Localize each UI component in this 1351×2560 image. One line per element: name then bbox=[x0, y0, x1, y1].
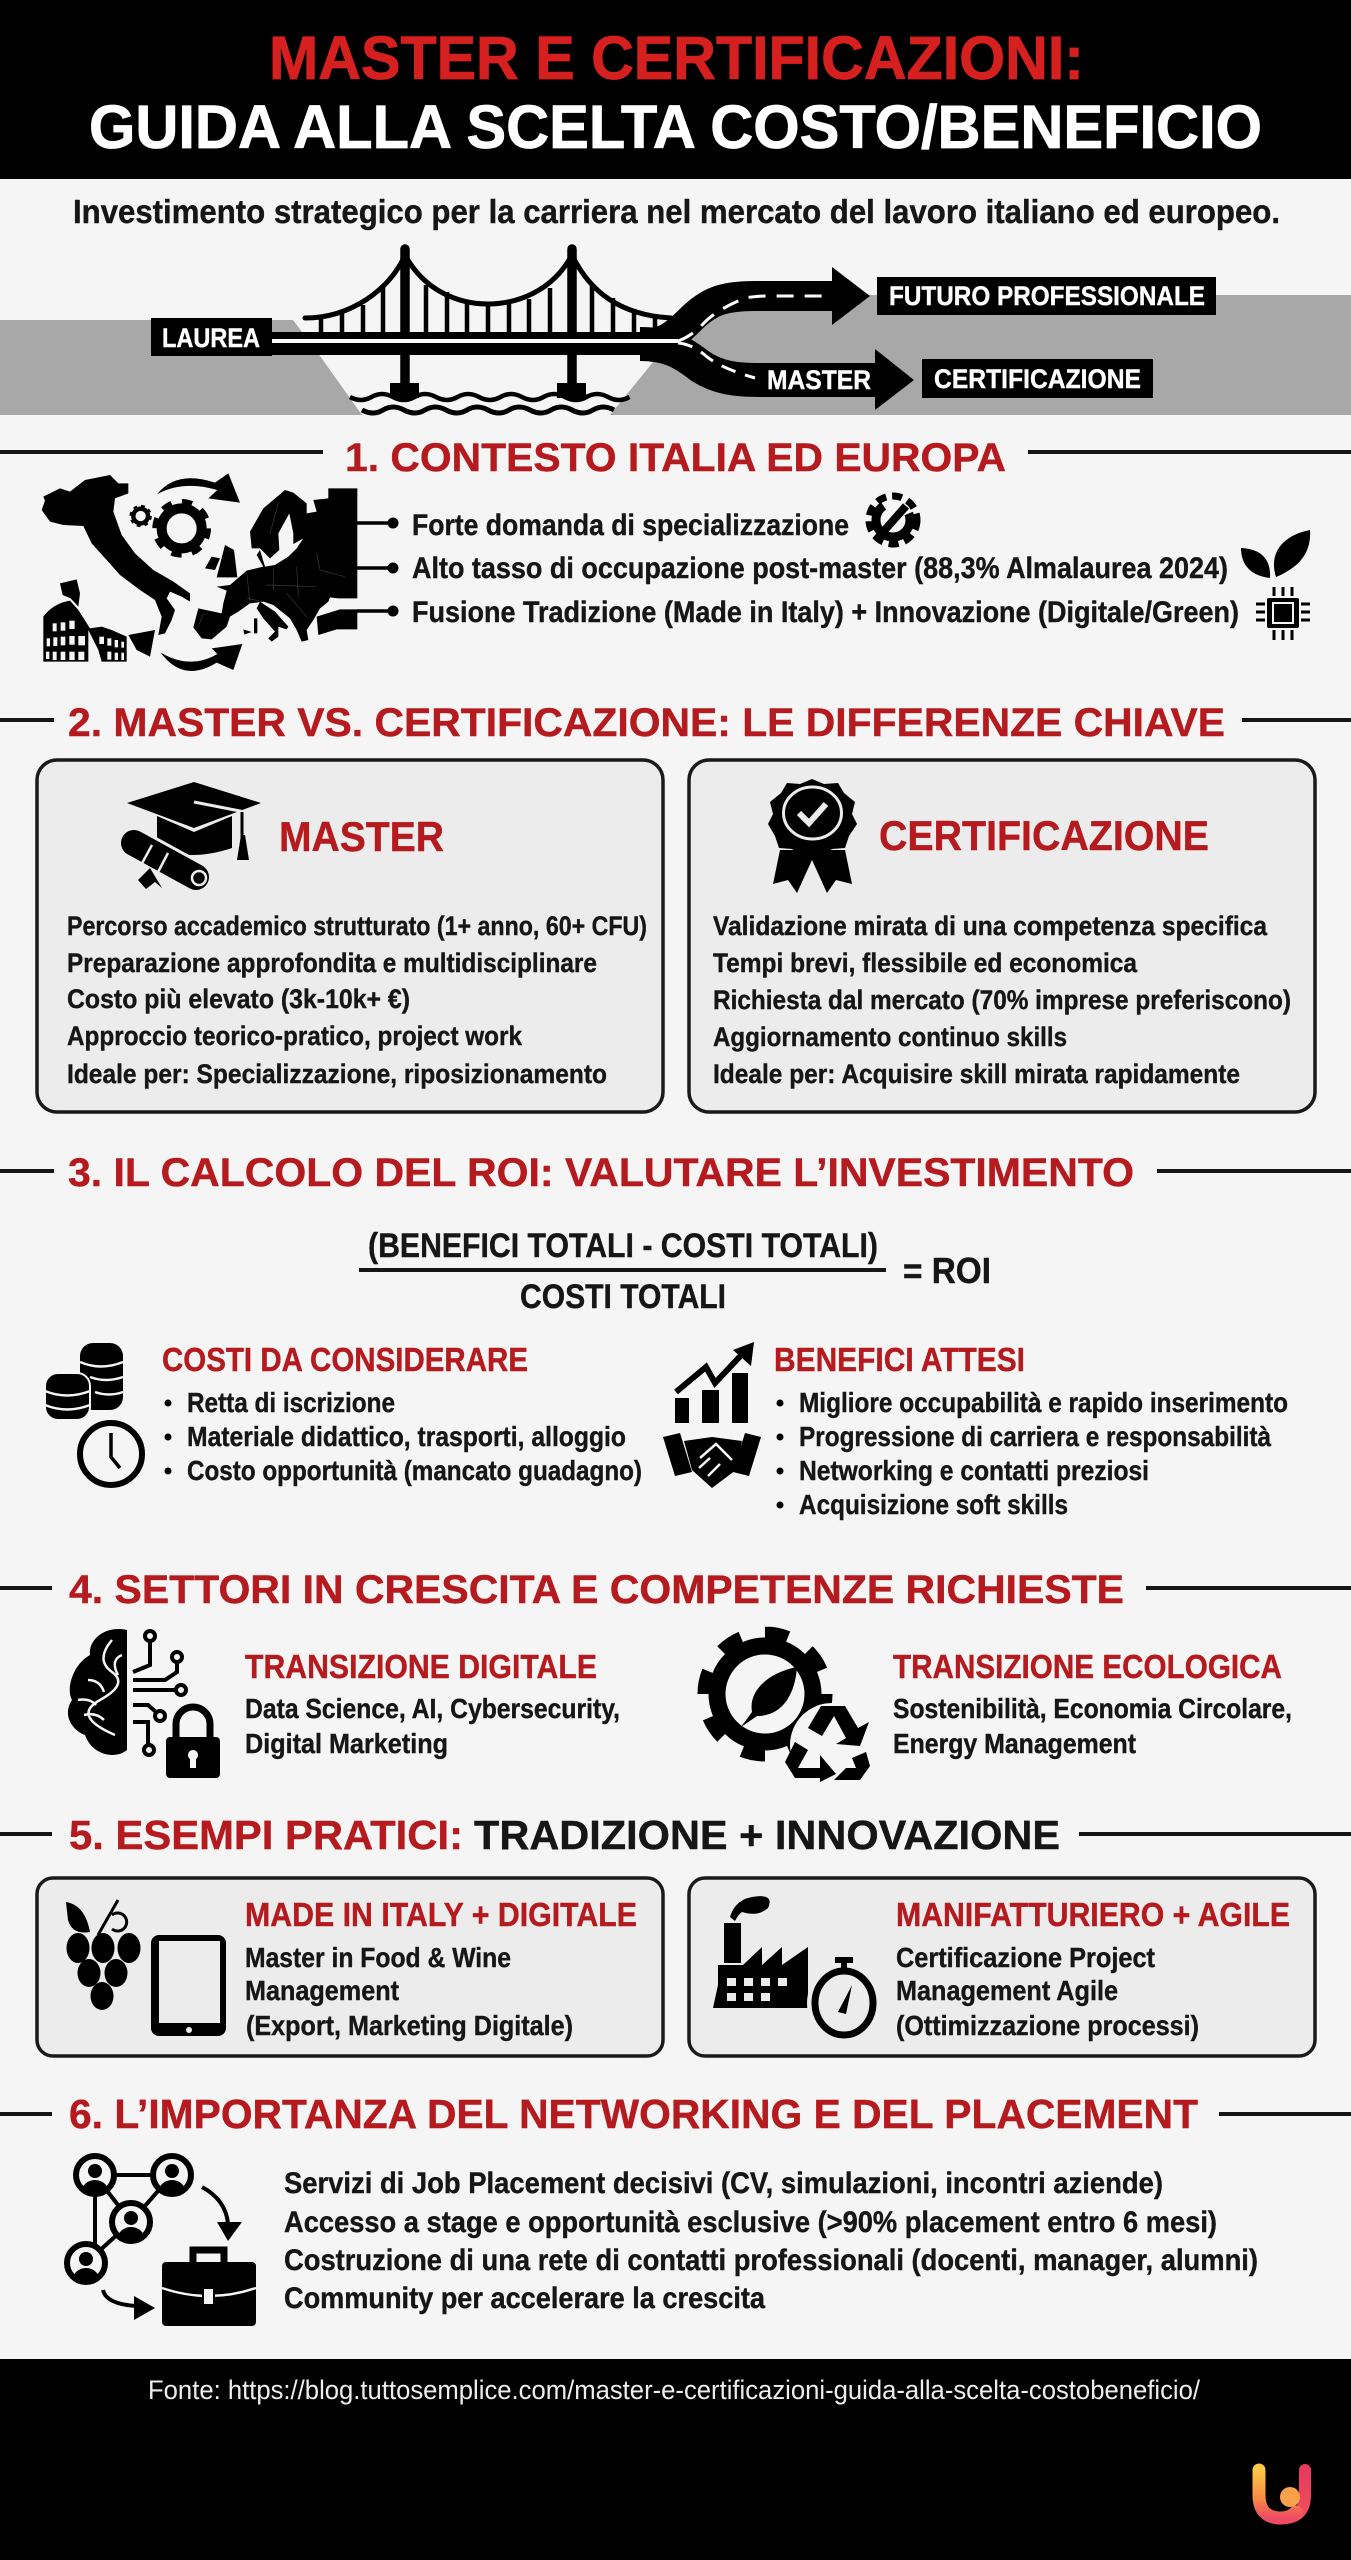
digital transition block: Digital Marketing bbox=[245, 1728, 448, 1759]
illustration: italy and europe map bbox=[42, 473, 357, 671]
footer bbox=[0, 2359, 1351, 2560]
section 4 heading: 4. SETTORI IN CRESCITA E COMPETENZE RICHIESTE bbox=[69, 1568, 1124, 1612]
text: manifatturiero + agile: Certificazione Project bbox=[896, 1942, 1155, 1973]
digital transition block: TRANSIZIONE DIGITALE bbox=[245, 1648, 597, 1685]
master feature list: Ideale per: Specializzazione, riposizionamento bbox=[67, 1059, 607, 1089]
label: certificazione: CERTIFICAZIONE bbox=[934, 364, 1141, 394]
benefits list: Migliore occupabilità e rapido inserimento bbox=[799, 1387, 1288, 1418]
panel: master bbox=[37, 760, 663, 1112]
icon: coin stacks bbox=[45, 1343, 123, 1420]
section 5 heading bbox=[0, 1812, 1351, 1858]
heading: master: MASTER bbox=[279, 813, 444, 860]
connector lines to bullet points bbox=[357, 518, 398, 616]
subtitle: Investimento strategico per la carriera nel mercato del lavoro italiano ed europeo. bbox=[73, 193, 1280, 230]
section 2 heading: 2. MASTER VS. CERTIFICAZIONE: LE DIFFERENZE CHIAVE bbox=[68, 701, 1225, 745]
bridge diagram: from degree to professional future bbox=[0, 249, 1351, 415]
networking list: Costruzione di una rete di contatti professionali (docenti, manager, alumni) bbox=[284, 2244, 1258, 2277]
costs list: Retta di iscrizione bbox=[187, 1387, 395, 1418]
networking list: Servizi di Job Placement decisivi (CV, simulazioni, incontri aziende) bbox=[284, 2167, 1163, 2200]
master feature list: Costo più elevato (3k-10k+ €) bbox=[67, 984, 410, 1014]
costs list bbox=[162, 1341, 642, 1486]
header banner bbox=[0, 0, 1351, 179]
certification feature list: Aggiornamento continuo skills bbox=[713, 1022, 1067, 1052]
benefits list: Acquisizione soft skills bbox=[799, 1489, 1068, 1520]
icon: brain, circuit and padlock bbox=[68, 1629, 220, 1778]
heading: benefits: BENEFICI ATTESI bbox=[774, 1341, 1025, 1378]
ROI formula: COSTI TOTALI bbox=[520, 1278, 726, 1316]
ROI formula: (BENEFICI TOTALI - COSTI TOTALI) bbox=[368, 1227, 878, 1265]
ecological transition block: TRANSIZIONE ECOLOGICA bbox=[893, 1648, 1282, 1685]
icon: graduation cap and diploma bbox=[127, 782, 261, 889]
icon: award badge bbox=[768, 779, 857, 893]
ecological transition block: Sostenibilità, Economia Circolare, bbox=[893, 1693, 1292, 1724]
heading: costs: COSTI DA CONSIDERARE bbox=[162, 1341, 528, 1378]
section 5 heading: 5. ESEMPI PRATICI: bbox=[69, 1812, 463, 1858]
label: master: MASTER bbox=[767, 365, 871, 395]
panel: certificazione bbox=[689, 760, 1315, 1112]
section 6 heading: 6. L’IMPORTANZA DEL NETWORKING E DEL PLACEMENT bbox=[69, 2091, 1198, 2137]
icon: growth chart bbox=[675, 1342, 754, 1423]
text: manifatturiero + agile: MANIFATTURIERO + AGILE bbox=[896, 1896, 1290, 1933]
source link: Fonte: https://blog.tuttosemplice.com/master-e-certificazioni-guida-alla-scelta-costobeneficio/ bbox=[148, 2375, 1200, 2405]
logo bbox=[1259, 2470, 1305, 2518]
icon: network and briefcase bbox=[67, 2156, 256, 2326]
icon: gear with leaf and recycling bbox=[705, 1634, 874, 1787]
master feature list: Approccio teorico-pratico, project work bbox=[67, 1021, 523, 1051]
networking list bbox=[284, 2167, 1258, 2315]
text: manifatturiero + agile: (Ottimizzazione processi) bbox=[896, 2010, 1199, 2041]
certification feature list: Ideale per: Acquisire skill mirata rapidamente bbox=[713, 1059, 1240, 1089]
section 3 heading: 3. IL CALCOLO DEL ROI: VALUTARE L’INVESTIMENTO bbox=[68, 1151, 1134, 1195]
certification feature list: Richiesta dal mercato (70% imprese preferiscono) bbox=[713, 985, 1291, 1015]
master feature list: Percorso accademico strutturato (1+ anno, 60+ CFU) bbox=[67, 911, 647, 941]
benefits list bbox=[774, 1341, 1288, 1520]
costs list: Materiale didattico, trasporti, alloggio bbox=[187, 1421, 626, 1452]
panel: made in italy + digitale bbox=[37, 1878, 663, 2056]
text: made in italy + digitale bbox=[245, 1896, 637, 2041]
icon: clock bbox=[80, 1423, 142, 1485]
section 1 bullet text bbox=[412, 509, 1239, 629]
digital transition block: Data Science, AI, Cybersecurity, bbox=[245, 1693, 620, 1724]
text: made in italy + digitale: MADE IN ITALY + DIGITALE bbox=[245, 1896, 637, 1933]
section 1 heading: 1. CONTESTO ITALIA ED EUROPA bbox=[345, 436, 1006, 480]
icon: handshake bbox=[663, 1433, 761, 1488]
panel: manifatturiero + agile bbox=[689, 1878, 1315, 2056]
section 5 heading: TRADIZIONE + INNOVAZIONE bbox=[474, 1812, 1060, 1858]
ROI formula bbox=[359, 1227, 991, 1316]
heading: certificazione: CERTIFICAZIONE bbox=[879, 812, 1209, 859]
master feature list: Preparazione approfondita e multidisciplinare bbox=[67, 948, 597, 978]
icon: grapes and tablet bbox=[66, 1900, 226, 2036]
ecological transition block: Energy Management bbox=[893, 1728, 1136, 1759]
label: futuro professionale: FUTURO PROFESSIONALE bbox=[889, 281, 1205, 311]
icon: factory and stopwatch bbox=[713, 1896, 881, 2042]
ROI formula: = ROI bbox=[903, 1250, 991, 1291]
section 1 bullet text: Forte domanda di specializzazione bbox=[412, 509, 849, 542]
certification feature list: Validazione mirata di una competenza specifica bbox=[713, 911, 1268, 941]
networking list: Community per accelerare la crescita bbox=[284, 2282, 765, 2315]
master feature list bbox=[67, 911, 647, 1089]
benefits list: Progressione di carriera e responsabilità bbox=[799, 1421, 1271, 1452]
section 1 bullet text: Fusione Tradizione (Made in Italy) + Innovazione (Digitale/Green) bbox=[412, 596, 1239, 629]
title line 2: GUIDA ALLA SCELTA COSTO/BENEFICIO bbox=[89, 93, 1262, 161]
digital transition block bbox=[245, 1648, 620, 1759]
certification feature list bbox=[713, 911, 1291, 1089]
text: manifatturiero + agile: Management Agile bbox=[896, 1975, 1118, 2006]
icon: gear and wrench bbox=[869, 496, 917, 544]
icon: leaves bbox=[1241, 530, 1310, 578]
text: made in italy + digitale: Management bbox=[245, 1975, 399, 2006]
networking list: Accesso a stage e opportunità esclusive (>90% placement entro 6 mesi) bbox=[284, 2206, 1217, 2239]
ecological transition block bbox=[893, 1648, 1292, 1759]
benefits list: Networking e contatti preziosi bbox=[799, 1455, 1149, 1486]
icon: microchip bbox=[1256, 587, 1310, 640]
title line 1: MASTER E CERTIFICAZIONI: bbox=[269, 24, 1084, 92]
section 1 heading bbox=[0, 436, 1351, 480]
certification feature list: Tempi brevi, flessibile ed economica bbox=[713, 948, 1138, 978]
text: made in italy + digitale: Master in Food & Wine bbox=[245, 1942, 511, 1973]
text: made in italy + digitale: (Export, Marketing Digitale) bbox=[246, 2010, 573, 2041]
section 1 bullet text: Alto tasso di occupazione post-master (88,3% Almalaurea 2024) bbox=[412, 552, 1228, 585]
text: manifatturiero + agile bbox=[896, 1896, 1290, 2041]
label: laurea: LAUREA bbox=[162, 323, 260, 353]
costs list: Costo opportunità (mancato guadagno) bbox=[187, 1455, 642, 1486]
